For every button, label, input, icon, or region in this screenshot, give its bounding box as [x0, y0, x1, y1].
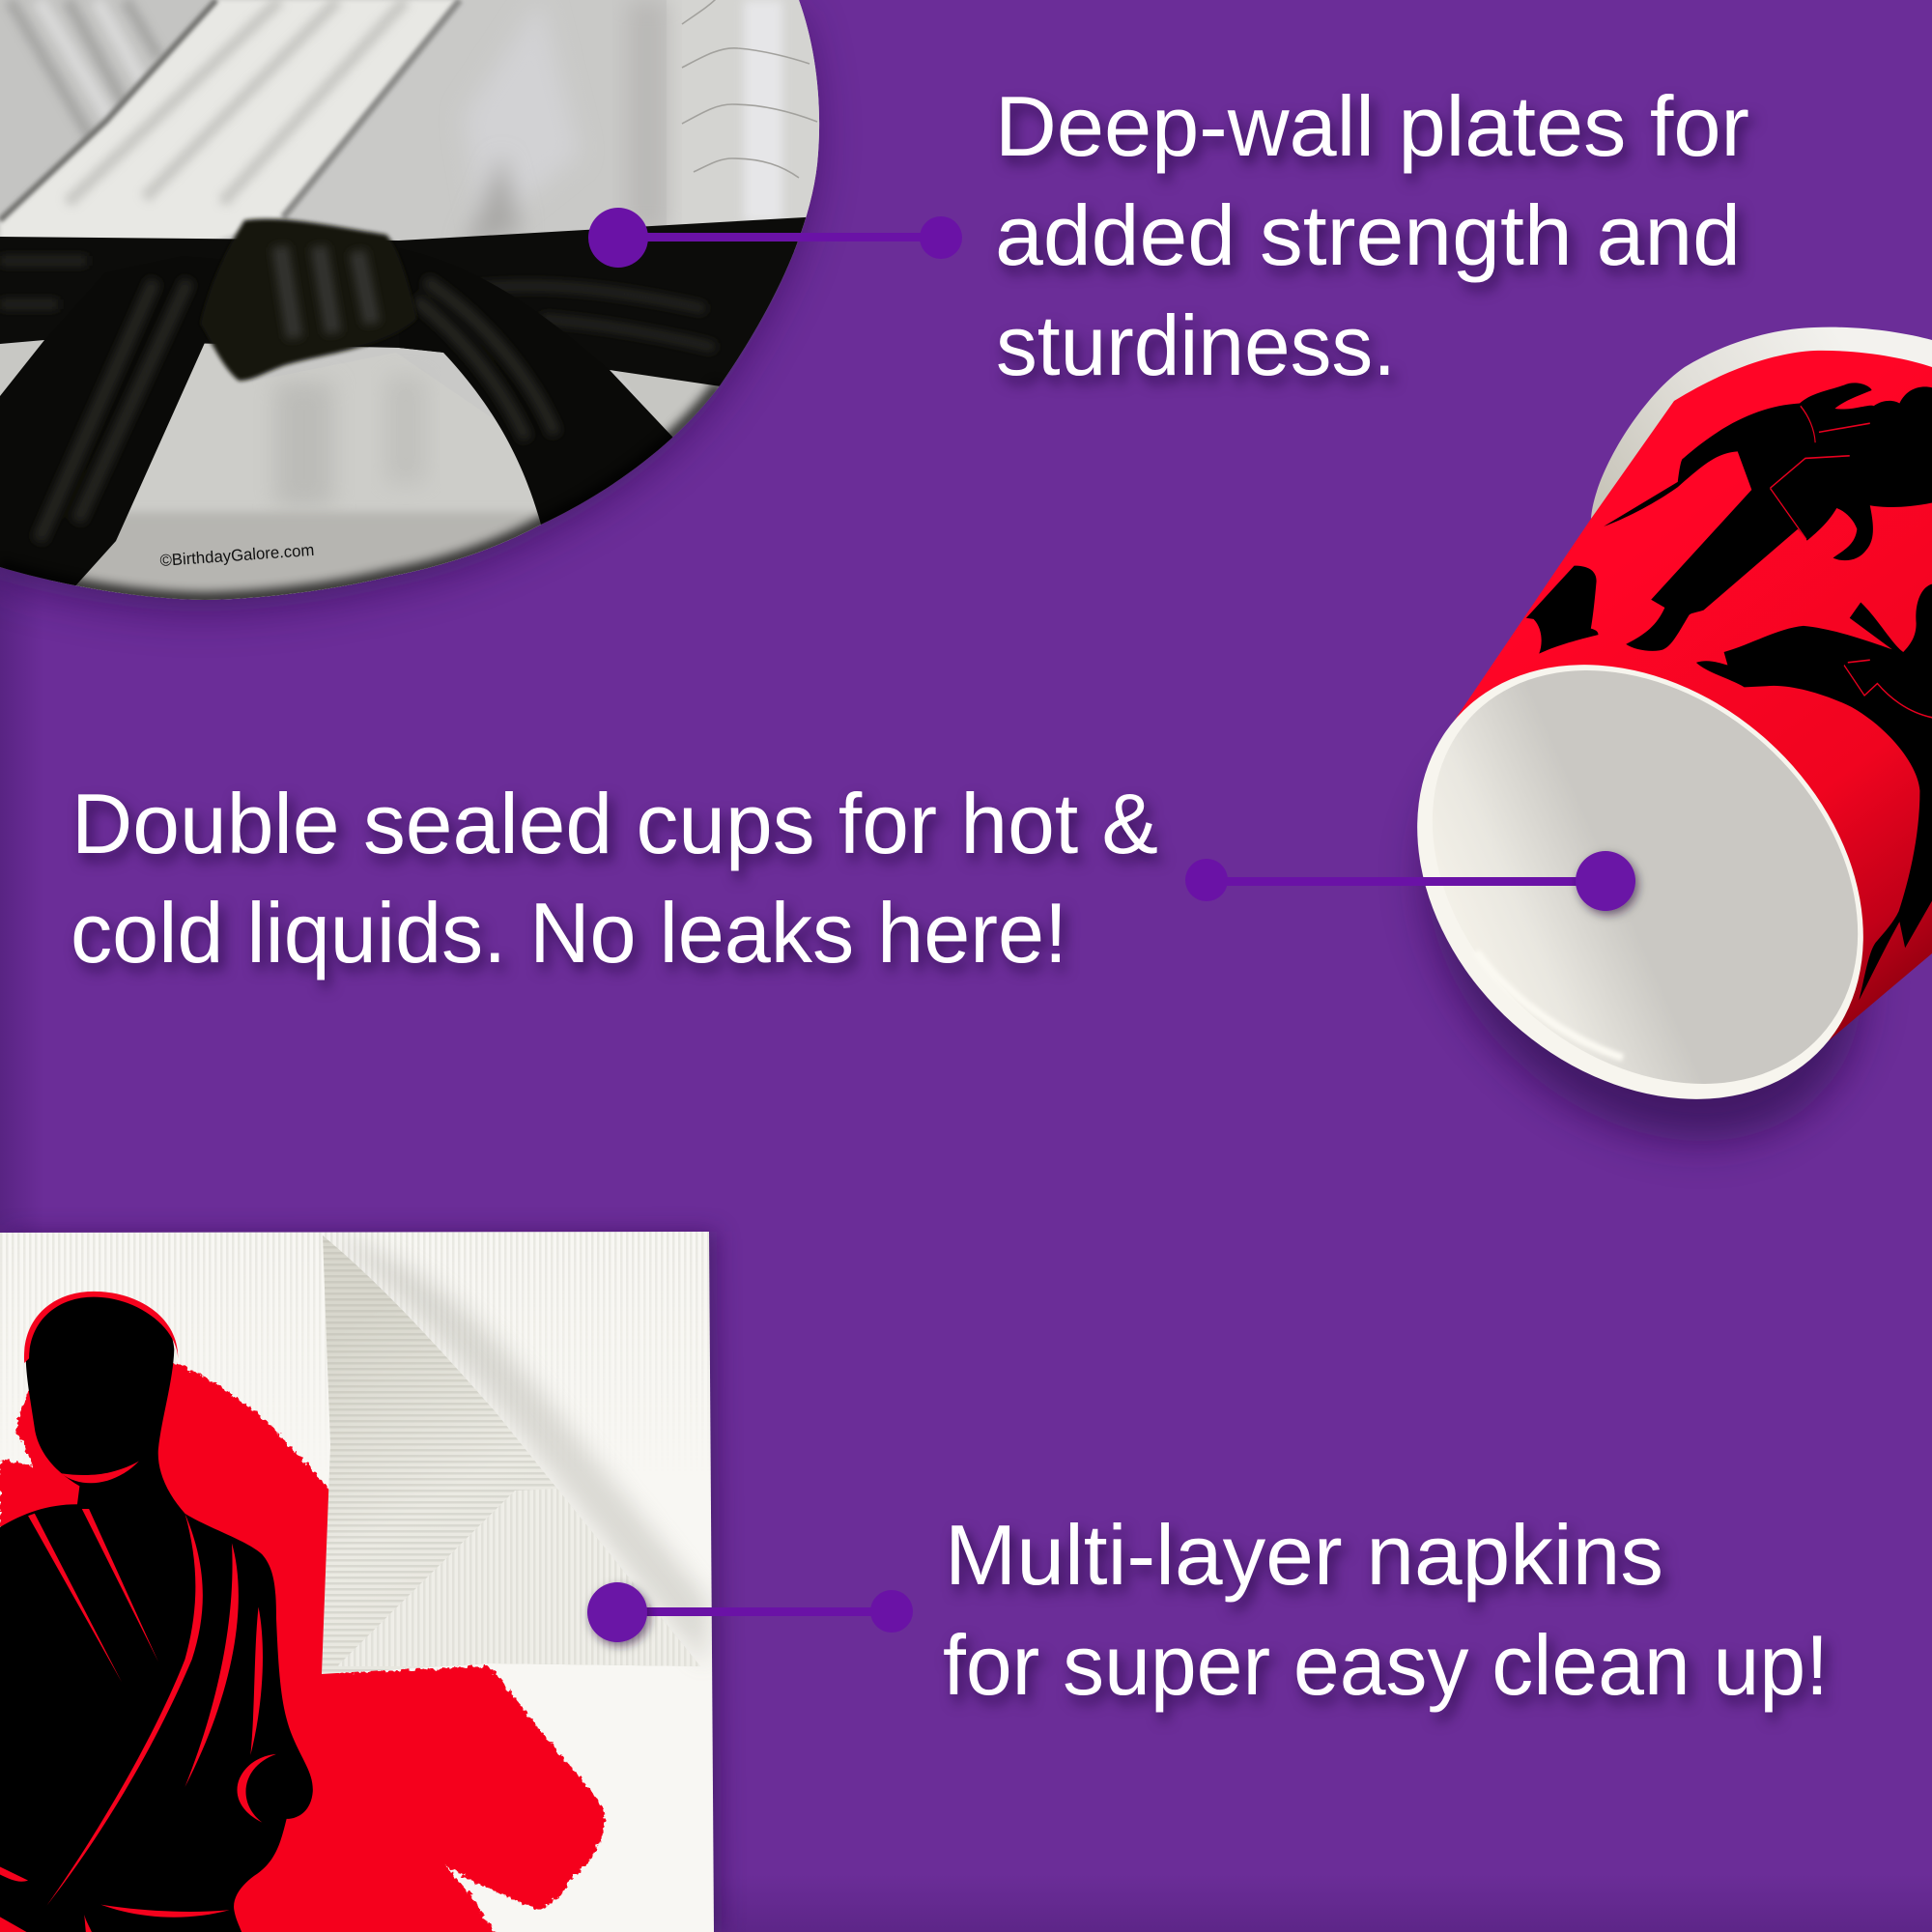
text: plates: sturdiness.	[996, 298, 1396, 393]
lower gi	[48, 384, 564, 600]
text: plates: Deep-wall plates for	[995, 78, 1749, 174]
belt knot	[200, 218, 417, 381]
cup rim	[1591, 327, 1932, 519]
connector: cup	[1185, 851, 1635, 911]
text: napkins: for super easy clean up!	[943, 1617, 1829, 1713]
black belt	[0, 216, 821, 618]
plate rim ridges	[628, 0, 831, 251]
figure red outline and robe lines	[0, 1292, 276, 1932]
flap shadow	[328, 1236, 710, 1666]
cup silhouettes	[1526, 383, 1932, 1000]
gi lapel back	[2, 0, 166, 139]
cup base crease	[1476, 952, 1623, 1058]
text: cups	[71, 776, 1158, 980]
folded corner	[319, 1227, 705, 1681]
connector: napkin	[587, 1582, 913, 1642]
text: plates	[995, 78, 1749, 393]
karate figure	[0, 1292, 313, 1932]
connector: plate	[588, 208, 962, 268]
plate with karate gi and black belt	[0, 0, 831, 618]
cup base inner	[1350, 586, 1932, 1168]
cup body	[1449, 351, 1932, 1053]
napkin	[0, 1227, 722, 1932]
cup lying on its side	[1407, 327, 1932, 1160]
text: plates: added strength and	[995, 187, 1741, 283]
text: napkins: Multi-layer napkins	[945, 1507, 1663, 1603]
cup base outer rim	[1330, 576, 1932, 1188]
text: cups: cold liquids. No leaks here!	[71, 885, 1067, 980]
plate copyright text: ©BirthdayGalore.com	[159, 541, 315, 570]
red paint blot	[0, 1363, 605, 1932]
gi lapel front	[0, 0, 460, 242]
text: cups: Double sealed cups for hot &	[71, 776, 1158, 871]
text: napkins	[943, 1507, 1829, 1713]
